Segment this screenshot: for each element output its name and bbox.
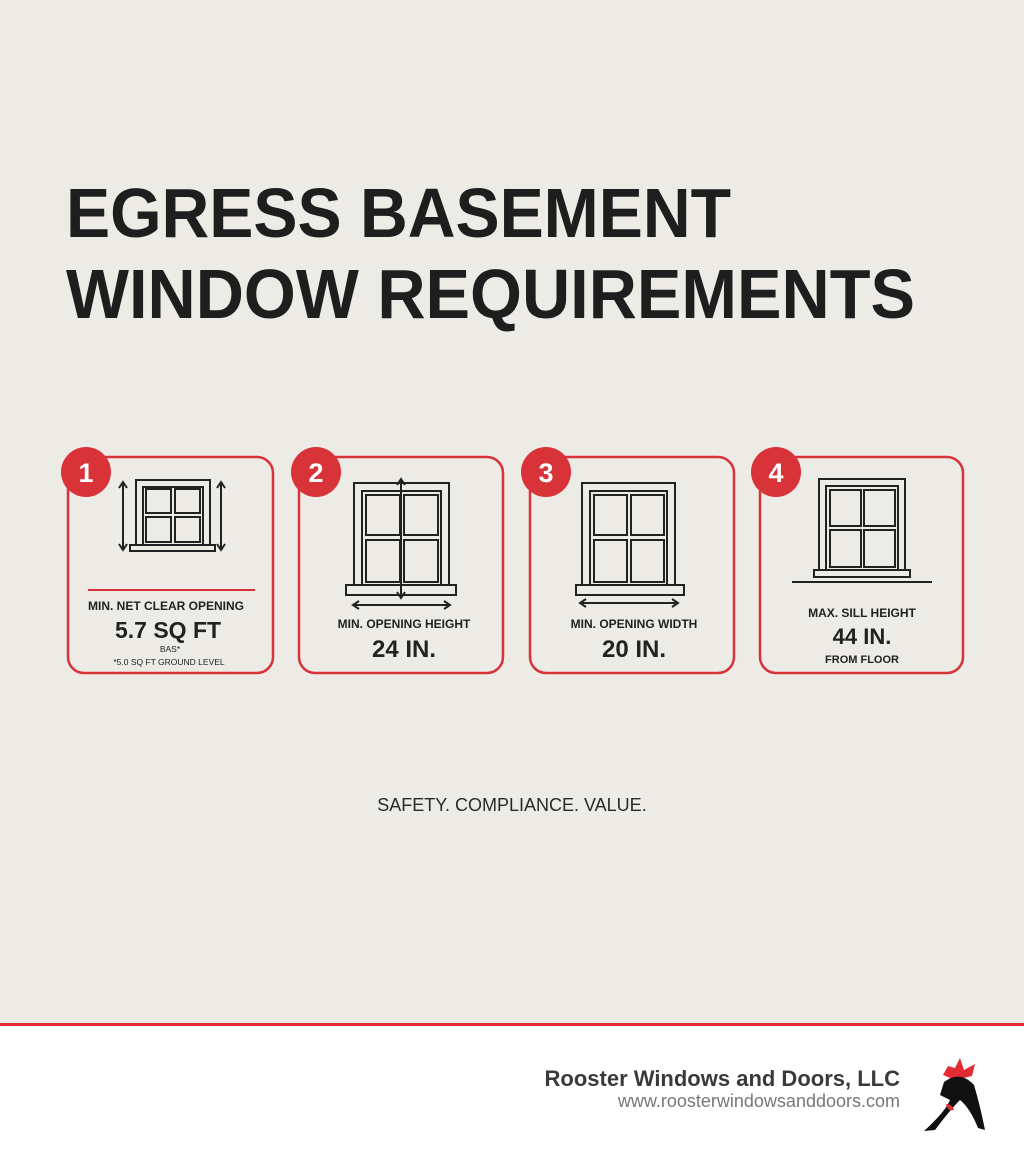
text: card 2: 24 IN. (372, 636, 436, 663)
text: card 4: 44 IN. (833, 624, 891, 649)
text: card 2: MIN. OPENING HEIGHT (338, 617, 471, 631)
text: card 2 (338, 617, 471, 663)
icon: rooster logo (924, 1058, 985, 1131)
panel: card 1 net clear opening (68, 457, 273, 673)
panel: card 4 sill height (760, 457, 963, 673)
icon: window above floor (792, 479, 932, 582)
text: card 1 (88, 599, 244, 667)
text: card 1: MIN. NET CLEAR OPENING (88, 599, 244, 613)
badge 1: 1 (78, 458, 94, 488)
text: card 3: 20 IN. (602, 636, 666, 663)
text: card 4: MAX. SILL HEIGHT (808, 606, 917, 620)
badge 1 (61, 447, 111, 497)
icon: window with height arrows (119, 480, 225, 551)
footer url: www.roosterwindowsanddoors.com (617, 1091, 900, 1111)
badge 3 (521, 447, 571, 497)
panel: card 2 opening height (299, 457, 503, 673)
footer (0, 1023, 1024, 1154)
badge 4: 4 (768, 458, 784, 488)
title: EGRESS BASEMENT (66, 174, 731, 252)
badge 2 (291, 447, 341, 497)
text: card 1: *5.0 SQ FT GROUND LEVEL (113, 657, 225, 667)
text: card 4: FROM FLOOR (825, 654, 899, 666)
badge 3: 3 (538, 458, 554, 488)
title: WINDOW REQUIREMENTS (66, 255, 915, 333)
badge 4 (751, 447, 801, 497)
badge 2: 2 (308, 458, 324, 488)
text: card 1: BAS* (160, 644, 181, 654)
footer company name: Rooster Windows and Doors, LLC (545, 1066, 900, 1091)
text: card 4 (808, 606, 917, 666)
panel: card 3 opening width (530, 457, 734, 673)
text: card 3 (571, 617, 697, 663)
icon: window with horizontal arrow (576, 483, 684, 607)
icon: window with vertical arrow (346, 479, 456, 609)
tagline: SAFETY. COMPLIANCE. VALUE. (377, 795, 647, 815)
text: card 3: MIN. OPENING WIDTH (571, 617, 697, 631)
text: card 1: 5.7 SQ FT (115, 617, 221, 643)
title (66, 174, 915, 333)
